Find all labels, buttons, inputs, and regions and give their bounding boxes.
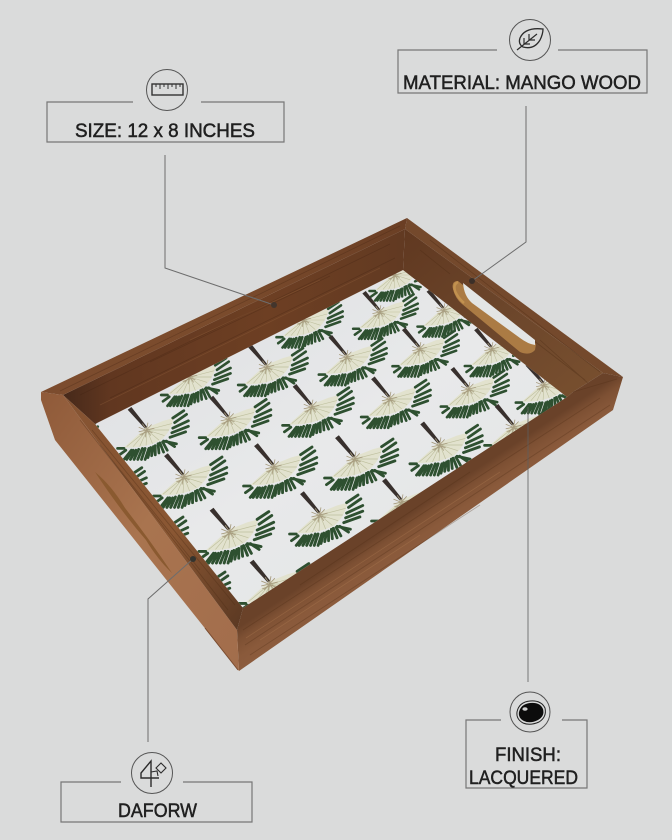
icon: ruler xyxy=(146,70,188,110)
back wall xyxy=(41,218,407,424)
size label: SIZE: 12 x 8 INCHES xyxy=(75,120,255,142)
brand label: DAFORW xyxy=(118,800,198,822)
finish label: FINISH: xyxy=(495,744,561,766)
size leader line xyxy=(165,155,277,308)
brand frame xyxy=(61,782,252,822)
tray photo xyxy=(30,218,623,671)
right wall with handle slot xyxy=(403,218,623,397)
size frame xyxy=(47,102,284,142)
material leader line xyxy=(469,106,526,284)
handle slot xyxy=(453,281,536,354)
material frame xyxy=(398,50,647,93)
front wall xyxy=(237,373,623,671)
finish label xyxy=(469,744,578,789)
brand leader line xyxy=(148,556,196,742)
callout: material xyxy=(398,20,647,284)
callout: size xyxy=(47,70,284,308)
finish label: LACQUERED xyxy=(469,767,578,789)
left handle slot xyxy=(95,472,172,573)
finish frame xyxy=(466,720,587,788)
callout: brand xyxy=(61,556,252,822)
callout: finish xyxy=(466,407,587,789)
finish leader line xyxy=(527,407,529,682)
left wall with slot xyxy=(41,392,243,671)
icon: lacquer drop xyxy=(510,692,550,732)
material label: MATERIAL: MANGO WOOD xyxy=(403,72,641,94)
tray floor with palm pattern xyxy=(95,270,567,608)
icon: leaf xyxy=(510,20,550,60)
icon: brand mark xyxy=(132,752,172,794)
